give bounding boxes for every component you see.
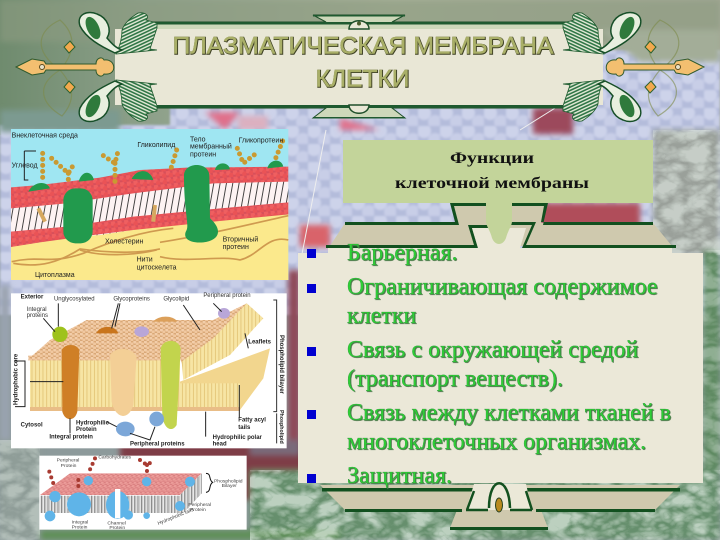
diagram 2 leader lines xyxy=(15,303,248,440)
diagram 3 labels: Protein xyxy=(61,463,77,469)
diagram 1 labels: Вторичный xyxy=(223,236,258,244)
diagram 2 labels: Peripheral proteins xyxy=(130,442,185,448)
diagram 2 labels: tails xyxy=(238,425,251,431)
diagram 2 labels: Cytosol xyxy=(21,423,43,429)
diagram 1 labels xyxy=(12,133,283,279)
function list: Защитная. xyxy=(347,463,452,489)
function list: Связь с окружающей средой xyxy=(347,337,639,363)
header: functions of the cell membrane xyxy=(343,140,653,203)
diagram 3 labels: Integral xyxy=(72,520,88,526)
diagram 3 labels: Protein xyxy=(109,525,125,531)
title text: ПЛАЗМАТИЧЕСКАЯ МЕМБРАНА xyxy=(172,32,554,60)
diagram 1 proteins xyxy=(28,161,283,243)
banner spear ornaments xyxy=(16,58,704,76)
function list: Барьерная. xyxy=(347,240,458,266)
diagram 1: membrane cross-section xyxy=(11,129,288,280)
diagram 2 labels: Exterior xyxy=(21,294,44,300)
diagram 3 labels: Protein xyxy=(190,507,206,513)
diagram 1 sugar chains xyxy=(43,141,283,182)
diagram 1 labels: цитоскелета xyxy=(137,265,177,272)
diagram 1 labels: Цитоплазма xyxy=(35,272,75,279)
diagram 2 labels: Integral xyxy=(27,307,47,313)
diagram 1 labels: протеин xyxy=(190,151,216,158)
function list: Ограничивающая содержимое xyxy=(347,274,658,300)
banner centre tabs xyxy=(349,21,369,113)
diagram 3 labels: Peripheral xyxy=(188,502,211,508)
diagram 2 labels: Phospholipid xyxy=(278,410,284,444)
diagram 3 proteins xyxy=(45,476,195,521)
bullet markers xyxy=(307,249,316,483)
diagram 3 labels xyxy=(57,454,243,531)
diagram 1 labels: Тело xyxy=(190,137,206,144)
diagram 3 labels: Carbohydrates xyxy=(98,454,132,460)
diagram 2 labels: Protein xyxy=(76,427,97,433)
diagram 3 labels: Phospholipid xyxy=(214,478,243,484)
diagram 3 labels: Peripheral xyxy=(57,458,79,464)
diagram 2 labels: Fatty acyl xyxy=(238,418,266,424)
diagram 2 labels: Glycolipid xyxy=(163,296,189,302)
panel lower ornament xyxy=(320,483,680,530)
diagram 1 labels: протеин xyxy=(223,244,249,251)
diagram 2 labels: Unglycosylated xyxy=(54,296,95,302)
diagram 2 labels: Glycoproteins xyxy=(113,296,150,302)
diagram 2 labels: Hydrophobic core xyxy=(13,353,19,405)
diagram 3 carbohydrates xyxy=(49,458,154,488)
banner scroll ends xyxy=(64,12,656,122)
title text: ПЛАЗМАТИЧЕСКАЯ МЕМБРАНА xyxy=(173,33,554,60)
diagram 1 labels: Гликопротеин xyxy=(239,137,283,144)
diagram 2 labels: Peripheral protein xyxy=(203,293,251,299)
diagram 1 filaments xyxy=(12,216,288,265)
diagram 2 labels xyxy=(13,293,284,448)
header: functions of the cell membrane: Функции xyxy=(450,150,534,167)
function list: клетки xyxy=(347,303,416,329)
diagram 1 labels: Углевод xyxy=(12,163,38,170)
diagram 2 labels: Hydrophilic xyxy=(76,420,110,426)
function list: многоклеточных организмах. xyxy=(347,429,646,455)
diagram 1 bilayer xyxy=(11,167,288,247)
panel upper ornament xyxy=(326,203,676,248)
function list: Связь между клетками тканей в xyxy=(347,400,671,426)
function list: (транспорт веществ). xyxy=(347,366,563,392)
diagram 1 labels: Гликолипид xyxy=(137,142,175,149)
title text: КЛЕТКИ xyxy=(316,66,410,92)
diagram 3 labels: Protein xyxy=(72,524,88,530)
title text xyxy=(172,32,554,93)
panel body xyxy=(298,248,703,483)
diagram 1 labels: мембранный xyxy=(190,142,232,150)
diagram 2 labels: Integral protein xyxy=(49,434,93,440)
diagram 2 labels: proteins xyxy=(27,313,48,319)
diagram 2 labels: Hydrophilic polar xyxy=(213,435,263,441)
function list xyxy=(347,240,671,489)
diagram 3: bilayer with channels xyxy=(39,454,247,531)
diagram 3 labels: Hydrophobic tails xyxy=(157,507,195,527)
diagram 2 labels: head xyxy=(213,442,227,448)
diagram 3 labels: Bilayer xyxy=(222,483,237,489)
header: functions of the cell membrane: клеточной мембраны xyxy=(395,175,590,192)
right text panel xyxy=(298,140,703,530)
diagram 1 labels: Нити xyxy=(137,257,153,264)
diagram 3 bilayer xyxy=(40,473,202,513)
title text: КЛЕТКИ xyxy=(316,66,410,93)
diagram 2 labels: Leaflets xyxy=(248,339,272,345)
diagram 2 proteins xyxy=(52,308,230,436)
diagram 2 bilayer xyxy=(28,303,270,411)
diagram 2 labels: Phospholipid bilayer xyxy=(278,335,284,395)
diagram 1 labels: Внеклеточная среда xyxy=(12,133,78,140)
diagram 3 labels: Channel xyxy=(107,520,126,526)
banner body xyxy=(150,15,570,118)
diagram 2: 3D phospholipid bilayer xyxy=(11,293,287,448)
title banner xyxy=(16,12,704,122)
diagram 1 labels: Холестерин xyxy=(105,239,144,246)
banner faded flourishes xyxy=(41,20,679,116)
